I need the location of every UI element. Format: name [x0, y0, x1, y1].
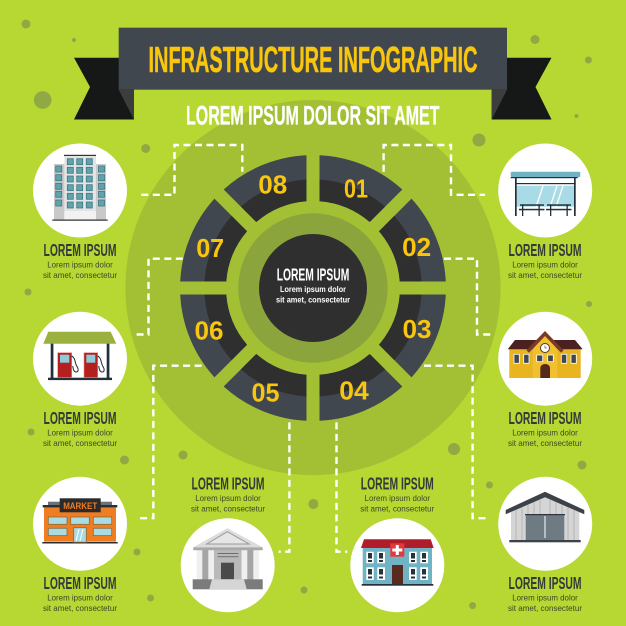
label: sit amet, consectetur	[43, 603, 117, 613]
label: sit amet, consectetur	[508, 603, 582, 613]
icon: market: MARKET	[63, 501, 97, 512]
item: market	[33, 477, 127, 613]
centre text: LOREM IPSUM	[277, 264, 349, 284]
label: sit amet, consectetur	[43, 438, 117, 448]
label: Lorem ipsum dolor	[195, 493, 261, 503]
label: sit amet, consectetur	[191, 503, 265, 513]
item: bus stop	[498, 144, 592, 280]
item: hospital	[350, 473, 444, 612]
label: LOREM IPSUM	[44, 573, 116, 593]
label: sit amet, consectetur	[43, 270, 117, 280]
label	[191, 473, 265, 513]
wheel numbers	[194, 169, 432, 407]
banner panel	[119, 28, 507, 90]
wheel numbers: 03	[402, 314, 432, 344]
item: school	[498, 312, 592, 448]
segment 02	[379, 199, 446, 282]
centre text: Lorem ipsum dolor	[280, 284, 347, 294]
segment 05	[224, 354, 306, 421]
label: LOREM IPSUM	[361, 473, 434, 493]
circle	[181, 518, 275, 612]
label	[43, 240, 117, 280]
wheel numbers: 06	[194, 316, 224, 346]
icon: office tower	[52, 155, 108, 221]
circle	[33, 312, 127, 406]
circle	[33, 144, 127, 238]
item: gas station	[33, 312, 127, 448]
item: bank	[181, 473, 275, 612]
icon: bus stop	[511, 172, 580, 216]
label: Lorem ipsum dolor	[512, 428, 578, 438]
label: Lorem ipsum dolor	[47, 260, 113, 270]
label	[508, 240, 582, 280]
wheel numbers: 07	[196, 233, 224, 263]
label: Lorem ipsum dolor	[365, 493, 430, 503]
icon: hospital	[361, 539, 434, 586]
icon: gas station	[43, 332, 116, 380]
icon: school	[508, 334, 583, 378]
centre text: sit amet, consectetur	[276, 294, 351, 304]
label	[360, 473, 434, 513]
centre ring	[238, 213, 388, 363]
segment 04	[320, 354, 402, 421]
label	[508, 573, 582, 613]
item: office tower	[33, 144, 127, 280]
label: LOREM IPSUM	[192, 473, 264, 493]
label: Lorem ipsum dolor	[47, 428, 113, 438]
segment 06	[180, 294, 247, 377]
segment 08	[224, 155, 306, 222]
circle	[498, 312, 592, 406]
left ribbon tail	[74, 58, 134, 120]
segment 07	[180, 199, 247, 282]
label: LOREM IPSUM	[44, 240, 116, 260]
centre text	[276, 264, 351, 304]
label: LOREM IPSUM	[44, 408, 116, 428]
item: warehouse	[498, 477, 592, 613]
wheel chart	[180, 155, 446, 421]
wheel numbers: 02	[402, 232, 431, 262]
label: sit amet, consectetur	[508, 438, 582, 448]
wheel numbers: 04	[339, 376, 369, 406]
circle	[33, 477, 127, 571]
wheel numbers: 01	[344, 174, 368, 204]
label: Lorem ipsum dolor	[47, 592, 113, 602]
icon: bank	[193, 528, 263, 589]
subtitle: LOREM IPSUM DOLOR SIT AMET	[186, 100, 440, 130]
circle	[350, 518, 444, 612]
label	[43, 573, 117, 613]
label: Lorem ipsum dolor	[512, 260, 578, 270]
label: sit amet, consectetur	[508, 270, 582, 280]
centre disc	[259, 234, 367, 342]
right ribbon tail	[492, 58, 552, 120]
dashed connectors	[134, 145, 492, 552]
segment 03	[379, 294, 446, 377]
label: Lorem ipsum dolor	[512, 592, 578, 602]
wheel numbers: 05	[252, 377, 280, 407]
label	[508, 408, 582, 448]
title banner	[74, 28, 552, 120]
wheel numbers: 08	[258, 169, 287, 199]
circle	[498, 477, 592, 571]
segment 01	[320, 155, 402, 222]
icon: warehouse	[506, 492, 584, 542]
circle	[498, 144, 592, 238]
label: sit amet, consectetur	[360, 503, 434, 513]
label	[43, 408, 117, 448]
large background circle	[125, 100, 501, 475]
